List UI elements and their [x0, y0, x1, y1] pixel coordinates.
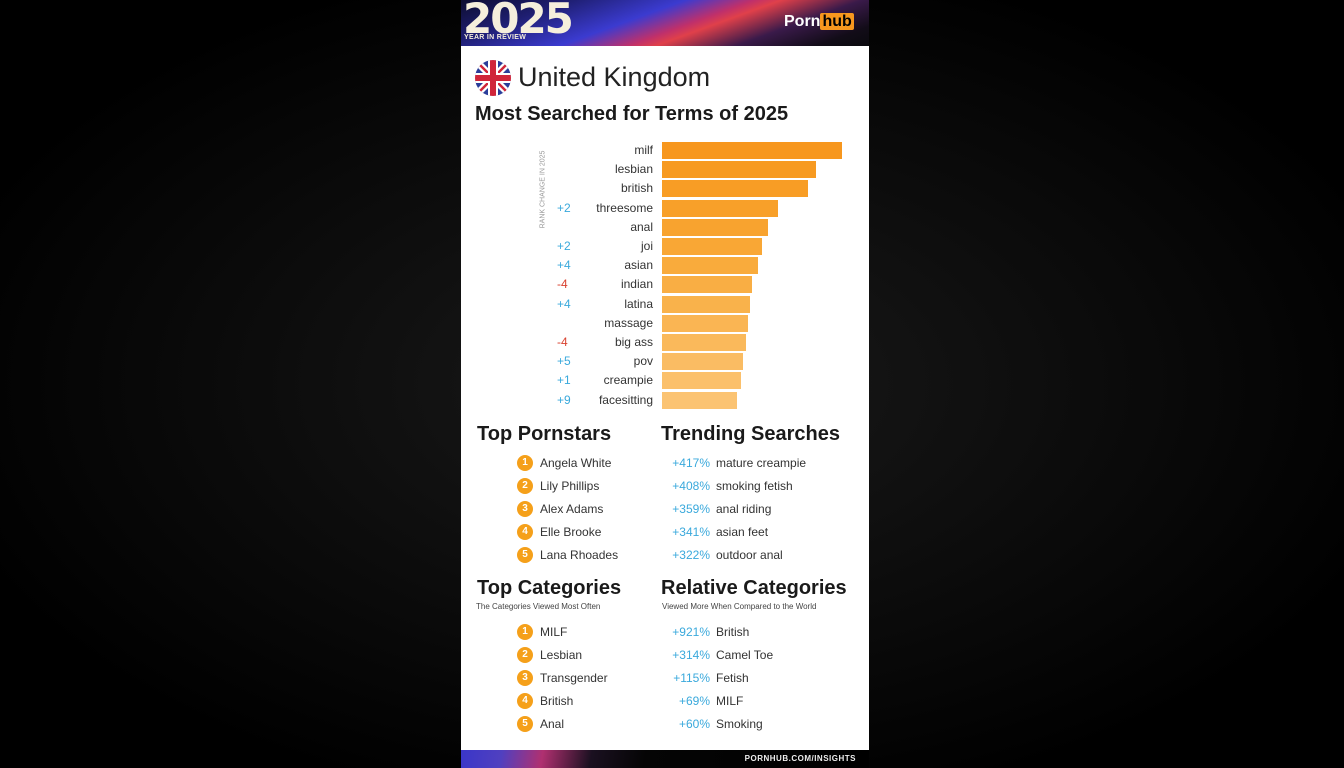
bar chart: search terms: lesbian [615, 162, 653, 176]
panel: top categories: 4 [522, 695, 528, 706]
panel: top pornstars: 5 [522, 549, 528, 560]
panel: relative categories: +314% [672, 648, 710, 662]
bar chart: search terms [540, 142, 842, 409]
bar chart: search terms: +1 [557, 373, 571, 387]
bar chart: search terms: asian [624, 258, 653, 272]
bar chart: search terms: +2 [557, 239, 571, 253]
panel: top categories: The Categories Viewed Most Often [476, 602, 600, 611]
footer text: url: PORNHUB.COM/INSIGHTS [745, 754, 856, 763]
panel: relative categories: British [716, 625, 749, 639]
panel: trending searches: asian feet [716, 525, 768, 539]
bar chart: search terms: creampie [604, 373, 653, 387]
bar chart: search terms: -4 [557, 335, 568, 349]
icon: UK flag [475, 60, 511, 96]
panel: infographic card [461, 0, 869, 768]
panel: relative categories: +115% [673, 671, 710, 685]
panel: trending searches: outdoor anal [716, 548, 783, 562]
panel: relative categories: Smoking [716, 717, 763, 731]
panel: top pornstars: Lily Phillips [540, 479, 599, 493]
panel: top pornstars: 2 [522, 480, 528, 491]
panel: trending searches: smoking fetish [716, 479, 793, 493]
panel: top categories: Anal [540, 717, 564, 731]
panel: top pornstars: Alex Adams [540, 502, 603, 516]
panel: top categories: Lesbian [540, 648, 582, 662]
panel: relative categories: Fetish [716, 671, 749, 685]
panel: trending searches: Trending Searches [661, 423, 840, 445]
panel: relative categories: +60% [679, 717, 710, 731]
panel: trending searches: +322% [672, 548, 710, 562]
bar chart: search terms: anal [630, 220, 653, 234]
panel: trending searches: mature creampie [716, 456, 806, 470]
panel: top pornstars: Top Pornstars [477, 423, 611, 445]
panel: relative categories: Camel Toe [716, 648, 773, 662]
panel: top categories [476, 577, 621, 732]
panel: top categories: 3 [522, 672, 528, 683]
header banner [461, 0, 869, 46]
panel: trending searches: +341% [672, 525, 710, 539]
heading: Most Searched for Terms: Most Searched for Terms of 2025 [475, 103, 788, 125]
panel: top pornstars: 3 [522, 503, 528, 514]
panel: relative categories: MILF [716, 694, 743, 708]
panel: top pornstars: 1 [522, 457, 528, 468]
panel: trending searches: +408% [672, 479, 710, 493]
bar chart: search terms: indian [621, 277, 653, 291]
panel: top pornstars: Elle Brooke [540, 525, 601, 539]
bar chart: search terms: big ass [615, 335, 653, 349]
bar chart: search terms: massage [604, 316, 653, 330]
bar chart: search terms: british [621, 181, 653, 195]
bar chart: search terms: +2 [557, 201, 571, 215]
panel: relative categories: Relative Categories [661, 577, 847, 599]
bar chart: search terms: threesome [596, 201, 653, 215]
panel: top pornstars: 4 [522, 526, 528, 537]
panel: top categories: 5 [522, 718, 528, 729]
bar chart: search terms: +5 [557, 354, 571, 368]
panel: relative categories [661, 577, 847, 731]
bar chart: search terms: facesitting [599, 393, 653, 407]
panel: top pornstars: Lana Rhoades [540, 548, 618, 562]
bar chart: search terms: +4 [557, 297, 571, 311]
bar chart: search terms: +4 [557, 258, 571, 272]
panel: trending searches: +417% [672, 456, 710, 470]
panel: trending searches [661, 423, 840, 562]
panel: relative categories: +921% [672, 625, 710, 639]
bar chart: search terms: -4 [557, 277, 568, 291]
panel: relative categories: Viewed More When Compared to the World [662, 602, 816, 611]
panel: top pornstars: Angela White [540, 456, 611, 470]
logo: pornhub: Pornhub [784, 13, 852, 30]
panel: top categories: MILF [540, 625, 567, 639]
panel: top categories: Transgender [540, 671, 608, 685]
heading: United Kingdom: United Kingdom [518, 62, 710, 92]
panel: top categories: British [540, 694, 573, 708]
bar chart: search terms: pov [634, 354, 653, 368]
bar chart: search terms: milf [634, 143, 653, 157]
bar chart: search terms: latina [624, 297, 653, 311]
panel: trending searches: +359% [672, 502, 710, 516]
panel: trending searches: anal riding [716, 502, 771, 516]
panel: relative categories: +69% [679, 694, 710, 708]
panel: top categories: 1 [522, 626, 528, 637]
axis label: rank change: RANK CHANGE IN 2025 [540, 151, 546, 228]
header banner: YEAR IN REVIEW [464, 34, 526, 41]
panel: top categories: 2 [522, 649, 528, 660]
bar chart: search terms: joi [641, 239, 653, 253]
footer [461, 750, 869, 768]
panel: top pornstars [477, 423, 618, 563]
bar chart: search terms: +9 [557, 393, 571, 407]
panel: top categories: Top Categories [477, 577, 621, 599]
